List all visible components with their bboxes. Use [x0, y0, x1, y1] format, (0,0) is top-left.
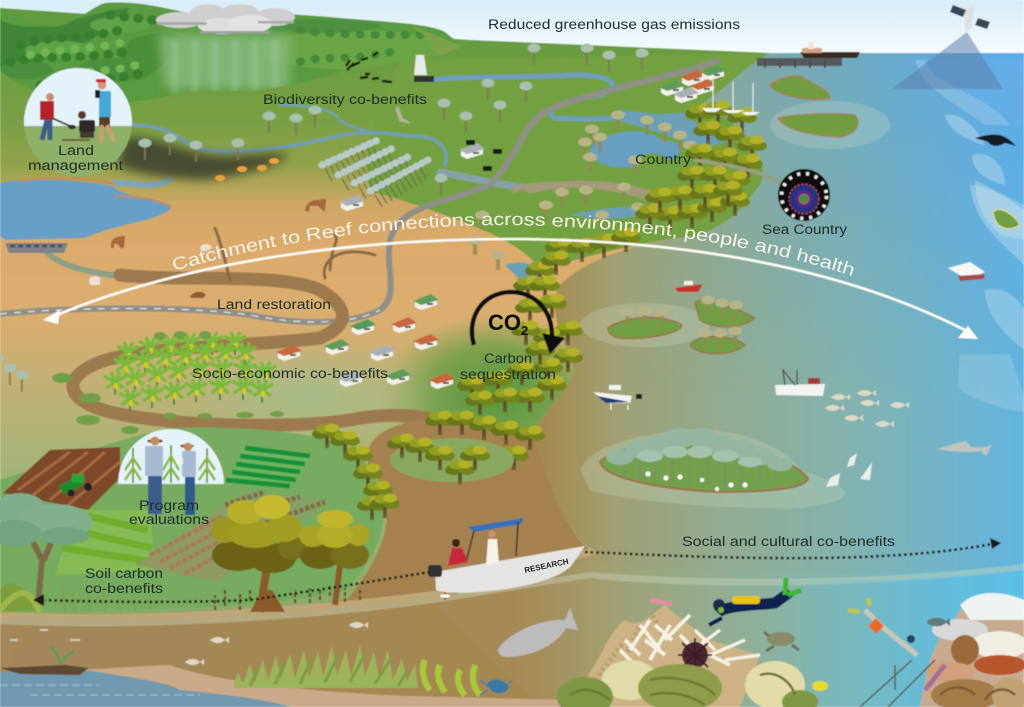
land: catchment terrain: [0, 8, 770, 616]
wetland trees: [468, 110, 697, 270]
fish school: [825, 390, 909, 427]
shark: [937, 441, 992, 456]
red boat: [675, 284, 703, 292]
heading: catchment to reef curved title: Catchment to Reef connections across environment, people and health: [173, 214, 854, 276]
clouds: [156, 4, 295, 34]
banana plantation: [52, 331, 284, 434]
bleached coral reef: [557, 600, 828, 707]
large island with bird colony: [580, 428, 845, 508]
estuary fish: [10, 622, 368, 665]
farm trees: large green tree: [0, 493, 92, 612]
satellite with sensing cone: [892, 5, 1003, 89]
connection arrow: [43, 239, 978, 339]
label: program evaluations: evaluations: [129, 512, 209, 527]
mangrove seedlings and grass along shore: [0, 585, 360, 612]
label: CO2: CO: [488, 310, 521, 335]
ship and jetty: [757, 42, 860, 68]
diver: [709, 578, 801, 625]
lower shoreline strip and fringe: [0, 548, 600, 620]
label: program evaluations: Program: [139, 498, 199, 513]
sea birds: [826, 453, 872, 487]
dotted arrow: soil carbon: [33, 572, 430, 606]
reef frame: [860, 660, 935, 707]
label: biodiversity co-benefits: Biodiversity co-benefits: [263, 92, 427, 107]
lake and dam: [0, 178, 172, 253]
rivers: [45, 75, 690, 280]
farm trees: olive trees: [211, 495, 370, 612]
label: carbon sequestration: Carbon: [484, 351, 532, 366]
houses: [276, 65, 726, 389]
label: Sea Country: Sea Country: [762, 222, 847, 237]
turtle: [764, 632, 799, 651]
vegetable field: [225, 447, 312, 487]
circle: program evaluations: [118, 429, 224, 515]
trawler: [775, 384, 825, 396]
snorkeller: [848, 598, 917, 655]
scattered gum trees: [0, 44, 648, 392]
fires: [215, 158, 279, 181]
label: carbon sequestration: sequestration: [460, 367, 556, 382]
label: reduced greenhouse gas emissions: Reduced greenhouse gas emissions: [488, 17, 740, 32]
icon: carbon cycle arrow: [472, 292, 565, 354]
catamaran: [948, 262, 985, 280]
farmer right: [176, 443, 196, 515]
gum tree plantation: [322, 140, 428, 201]
person with shovel: [40, 93, 76, 140]
label: socio-economic co-benefits: Socio-economic co-benefits: [192, 366, 388, 381]
label: land management: management: [28, 158, 123, 173]
label: land restoration: Land restoration: [217, 297, 331, 312]
label: land management: Land: [58, 143, 94, 158]
label: CO2: 2: [521, 323, 528, 338]
underwater zone: [0, 560, 1024, 707]
connector: Country to Sea Country: [694, 160, 782, 184]
label: research on boat: RESEARCH: [524, 557, 570, 575]
tractor: [59, 474, 92, 496]
brown sediment plume: [345, 418, 590, 602]
offshore islands: [580, 76, 1024, 354]
mountain range: [0, 2, 461, 102]
boats: [593, 80, 985, 410]
background: sky: [0, 0, 1024, 60]
kneeling person: [78, 111, 95, 138]
label: soil carbon co-benefits: Soil carbon: [85, 566, 163, 581]
circle: land management: [24, 68, 132, 182]
fishing boat small: [593, 392, 632, 403]
eroded river and gullies: [73, 228, 450, 425]
dotted arrow: social and cultural: [585, 538, 1001, 558]
coastal wetland pools: [505, 110, 730, 285]
seagrass: [233, 645, 480, 695]
burnt land patch: [118, 137, 290, 180]
sailboats: [702, 108, 760, 115]
research boat: [428, 518, 585, 600]
person with cap: [95, 79, 114, 143]
road: [0, 60, 720, 322]
mangroves: [312, 100, 767, 520]
crab: [480, 680, 512, 695]
ploughed field: [3, 447, 120, 510]
whale: [975, 135, 1016, 146]
icon: Sea Country emblem: [778, 169, 830, 221]
crop strips: [55, 510, 155, 575]
dugong: [498, 608, 578, 657]
arc path for curved title: [174, 225, 870, 282]
bottom sand and water: [0, 647, 570, 707]
wildlife on land: [89, 52, 502, 298]
label: social and cultural co-benefits: Social and cultural co-benefits: [682, 534, 895, 549]
label: soil carbon co-benefits: co-benefits: [85, 581, 163, 596]
farmland: [0, 428, 384, 612]
reef fish: [927, 618, 950, 626]
colourful coral reef: [860, 593, 1024, 707]
farmer left: [145, 436, 163, 514]
label: Country: Country: [635, 152, 691, 167]
